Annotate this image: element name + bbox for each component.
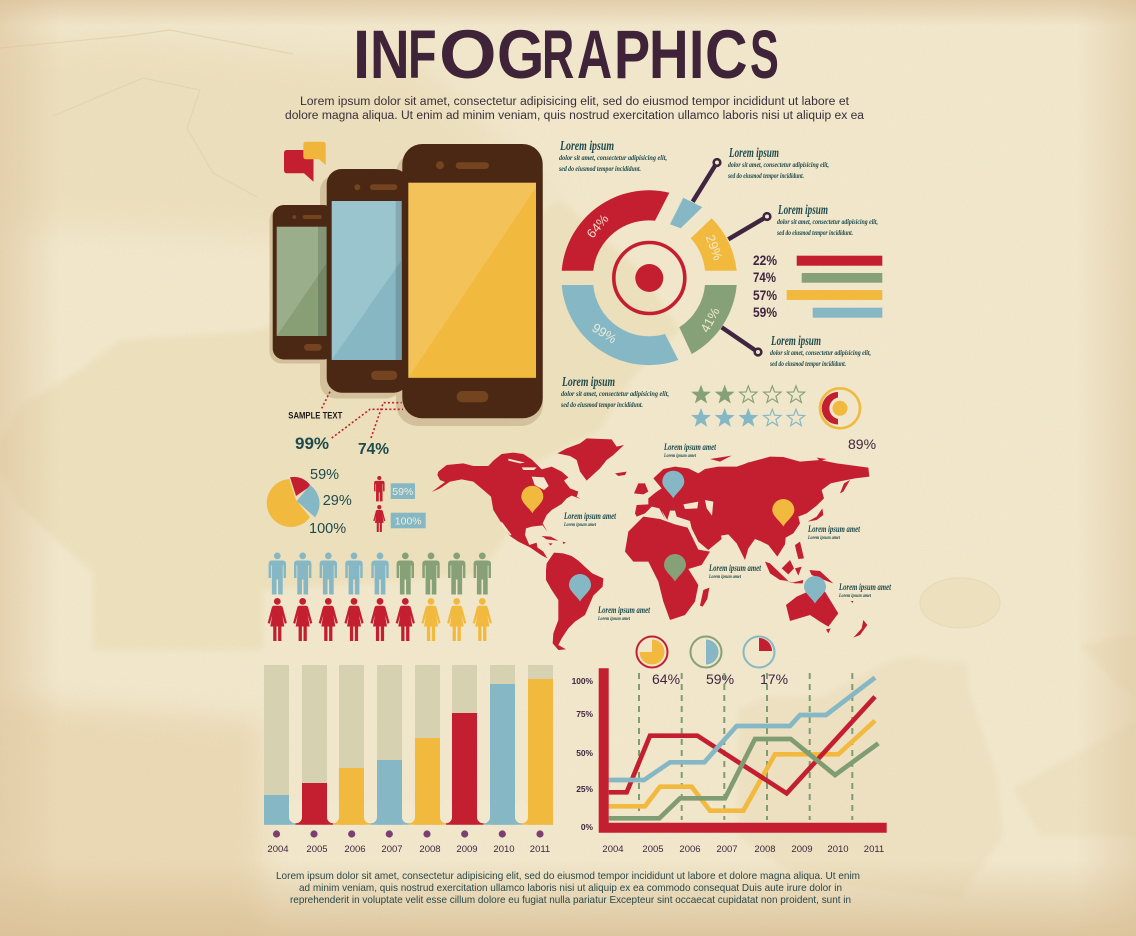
female icon bbox=[373, 505, 385, 532]
x axis labels: 2009 bbox=[791, 844, 813, 855]
centre target bbox=[614, 242, 685, 314]
southeast asia islands bbox=[765, 542, 833, 583]
iceland bbox=[615, 472, 627, 476]
title: C bbox=[705, 16, 748, 93]
map pin: south america bbox=[569, 574, 591, 602]
donut annotation: top right bbox=[727, 145, 829, 180]
y axis labels: 50% bbox=[576, 748, 594, 758]
map label: south america bbox=[597, 606, 650, 622]
map label: asia bbox=[807, 525, 860, 541]
male icon bbox=[374, 476, 385, 501]
world map bbox=[432, 438, 869, 650]
intro text: Lorem ipsum dolor sit amet, consectetur adipisicing elit, sed do eiusmod tempor incididunt ut labore et bbox=[300, 96, 850, 108]
red line bbox=[609, 697, 875, 793]
map label: europe: Lorem ipsum amet bbox=[663, 443, 716, 453]
y axis labels bbox=[572, 676, 594, 832]
donut annotation: bottom bbox=[560, 374, 669, 409]
icon: chat bubbles bbox=[284, 142, 326, 182]
donut annotation: top left: sed do eiusmod tempor incididunt. bbox=[558, 164, 641, 173]
gauge 89%: 89% bbox=[848, 436, 876, 452]
new zealand bbox=[851, 601, 867, 638]
gauge 89% bbox=[820, 388, 876, 452]
x axis labels: 2007 bbox=[716, 844, 738, 855]
map label: australia: Lorem ipsum amet bbox=[838, 593, 871, 599]
99 percent: 99% bbox=[295, 434, 329, 453]
labels bbox=[753, 252, 777, 320]
africa bbox=[625, 517, 710, 620]
bar values bbox=[264, 795, 296, 825]
green segment 41% bbox=[679, 285, 737, 354]
gauge 59%: 59% bbox=[706, 671, 734, 687]
map label: australia bbox=[838, 583, 891, 599]
line chart bbox=[572, 668, 887, 855]
map pin: asia bbox=[772, 499, 794, 526]
axes bbox=[599, 668, 887, 833]
blue stars bbox=[692, 409, 805, 426]
gauge 59% bbox=[690, 636, 734, 687]
pie chart: 100% bbox=[309, 521, 346, 537]
people pictogram: men bbox=[269, 552, 491, 594]
title: O bbox=[439, 16, 496, 93]
map label: north america: Lorem ipsum amet bbox=[563, 512, 616, 522]
footer text bbox=[276, 870, 860, 906]
labels: 22% bbox=[753, 252, 777, 268]
black sea and caspian sea bbox=[683, 500, 713, 516]
donut annotation: top right: dolor sit amet, consectetur adipisicing elit, bbox=[728, 160, 829, 169]
data lines bbox=[609, 678, 878, 818]
title: N bbox=[370, 16, 409, 93]
radial donut chart bbox=[562, 159, 770, 365]
donut annotation: bottom: Lorem ipsum bbox=[561, 374, 615, 389]
x axis labels: 2005 bbox=[642, 844, 664, 855]
map label: north america bbox=[563, 512, 616, 528]
south america bbox=[546, 553, 603, 650]
green line bbox=[609, 739, 878, 818]
title: G bbox=[497, 16, 545, 93]
map label: asia: Lorem ipsum amet bbox=[807, 525, 860, 535]
phones bbox=[270, 144, 543, 426]
gauge 17%: 17% bbox=[760, 671, 788, 687]
title: P bbox=[614, 16, 650, 93]
star ratings bbox=[692, 386, 805, 426]
red segment 64%: 64% bbox=[583, 211, 612, 241]
pie chart: 59% bbox=[310, 467, 339, 483]
britain bbox=[634, 483, 648, 494]
x axis labels: 2008 bbox=[754, 844, 776, 855]
title: I bbox=[352, 16, 370, 93]
year labels: 2009 bbox=[456, 844, 478, 855]
japan and kamchatka bbox=[808, 480, 850, 522]
donut annotation: middle right: dolor sit amet, consectetur adipisicing elit, bbox=[777, 217, 878, 226]
map label: africa: Lorem ipsum amet bbox=[708, 574, 741, 580]
blue segment 99% bbox=[562, 285, 678, 365]
greenland bbox=[557, 438, 624, 481]
north america bbox=[432, 453, 581, 558]
year labels: 2004 bbox=[267, 844, 289, 855]
map label: europe bbox=[663, 443, 716, 459]
phone shadows bbox=[270, 152, 543, 426]
map pin: africa bbox=[664, 554, 686, 582]
x axis labels: 2004 bbox=[602, 844, 624, 855]
caribbean islands bbox=[542, 536, 566, 545]
map pin: north america bbox=[521, 486, 543, 513]
female label: 100% bbox=[395, 516, 422, 528]
americas and greenland bbox=[432, 438, 627, 650]
title: H bbox=[649, 16, 689, 93]
year labels: 2005 bbox=[306, 844, 328, 855]
bar tracks bbox=[264, 665, 553, 825]
map label: south america: Lorem ipsum amet bbox=[597, 616, 630, 622]
year labels: 2010 bbox=[493, 844, 515, 855]
year labels: 2008 bbox=[419, 844, 441, 855]
donut annotation: lower right: Lorem ipsum bbox=[770, 333, 821, 348]
74 percent: 74% bbox=[358, 441, 389, 458]
pie chart: 29% bbox=[323, 493, 352, 509]
small pie gauges bbox=[636, 636, 788, 687]
donut annotation: top right: sed do eiusmod tempor incididunt. bbox=[727, 171, 804, 180]
year labels bbox=[267, 844, 550, 855]
gauge 17% bbox=[744, 636, 788, 687]
map label: north america: Lorem ipsum amet bbox=[563, 522, 596, 528]
pie chart bbox=[267, 467, 352, 537]
year labels: 2011 bbox=[530, 844, 550, 855]
people pictogram: women bbox=[268, 598, 492, 641]
footer text: ad minim veniam, quis nostrud exercitation ullamco laboris nisi ut aliquip ex ea commodo consequat Duis aute irure dolor in bbox=[299, 882, 842, 894]
dots bbox=[273, 830, 544, 838]
red segment 64% bbox=[562, 190, 669, 271]
stick connectors bbox=[693, 159, 770, 355]
gauge 64%: 64% bbox=[652, 671, 680, 687]
y axis labels: 25% bbox=[576, 784, 594, 794]
labels: 57% bbox=[753, 287, 777, 303]
x axis labels: 2006 bbox=[679, 844, 701, 855]
title: S bbox=[750, 16, 779, 93]
x axis labels: 2010 bbox=[827, 844, 849, 855]
y axis labels: 100% bbox=[572, 676, 594, 686]
blue line bbox=[609, 678, 875, 780]
map pin: australia bbox=[804, 576, 826, 604]
intro text bbox=[285, 96, 865, 122]
blue wedge bbox=[670, 198, 702, 228]
labels: 74% bbox=[753, 269, 776, 285]
male label: 59% bbox=[392, 486, 413, 498]
medium phone bbox=[327, 169, 409, 393]
map label: asia: Lorem ipsum amet bbox=[807, 535, 840, 541]
y axis labels: 0% bbox=[581, 822, 594, 832]
stacked bar chart bbox=[264, 665, 553, 855]
donut annotation: top left: Lorem ipsum bbox=[559, 138, 614, 153]
map label: south america: Lorem ipsum amet bbox=[597, 606, 650, 616]
labels: 59% bbox=[753, 304, 777, 320]
intro text: dolore magna aliqua. Ut enim ad minim veniam, quis nostrud exercitation ullamco laboris nisi ut aliquip ex ea bbox=[285, 110, 865, 122]
gender stat bbox=[373, 476, 426, 532]
europe, asia, africa and oceania bbox=[625, 456, 869, 638]
x axis labels: 2011 bbox=[864, 844, 884, 855]
green segment 41%: 41% bbox=[697, 304, 723, 335]
donut annotation: middle right: sed do eiusmod tempor incididunt. bbox=[776, 228, 853, 237]
map pin: europe bbox=[662, 471, 684, 498]
year labels: 2006 bbox=[344, 844, 366, 855]
title: F bbox=[408, 16, 437, 93]
map label: africa: Lorem ipsum amet bbox=[708, 564, 761, 574]
donut annotation: bottom: dolor sit amet, consectetur adipisicing elit, bbox=[561, 389, 669, 398]
gauge 64% bbox=[636, 636, 680, 687]
yellow line bbox=[609, 721, 875, 811]
title bbox=[352, 16, 779, 93]
yellow segment 29% bbox=[691, 218, 737, 271]
large phone bbox=[402, 144, 543, 418]
arctic slivers bbox=[710, 456, 827, 472]
small phone bbox=[273, 205, 335, 360]
donut annotation: middle right bbox=[776, 202, 878, 237]
yellow segment 29%: 29% bbox=[703, 233, 726, 263]
year labels: 2007 bbox=[381, 844, 403, 855]
title: R bbox=[542, 16, 574, 93]
donut annotation: lower right bbox=[769, 333, 871, 368]
title: A bbox=[577, 16, 612, 93]
rounded gaps bbox=[289, 800, 528, 823]
donut annotation: lower right: dolor sit amet, consectetur adipisicing elit, bbox=[770, 348, 871, 357]
y axis labels: 75% bbox=[576, 709, 594, 719]
dashed guides bbox=[639, 673, 852, 820]
eurasia bbox=[635, 457, 869, 560]
madagascar bbox=[700, 588, 709, 607]
blue segment 99%: 99% bbox=[589, 320, 620, 347]
green stars bbox=[692, 386, 805, 402]
donut annotation: top right: Lorem ipsum bbox=[728, 145, 779, 160]
donut annotation: top left bbox=[558, 138, 667, 173]
map label: australia: Lorem ipsum amet bbox=[838, 583, 891, 593]
title: I bbox=[689, 16, 704, 93]
hudson bay and northern channels bbox=[501, 459, 549, 535]
map label: europe: Lorem ipsum amet bbox=[663, 453, 696, 459]
horizontal bars bbox=[753, 252, 882, 320]
map label: africa bbox=[708, 564, 761, 580]
phone callouts bbox=[288, 392, 403, 458]
australia bbox=[786, 590, 838, 633]
sample text label: SAMPLE TEXT bbox=[288, 410, 343, 420]
footer text: reprehenderit in voluptate velit esse cillum dolore eu fugiat nulla pariatur Excepteur sint occaecat cupidatat non proident, sunt in bbox=[290, 894, 851, 906]
donut annotation: bottom: sed do eiusmod tempor incididunt. bbox=[560, 400, 643, 409]
donut annotation: top left: dolor sit amet, consectetur adipisicing elit, bbox=[559, 153, 667, 162]
donut annotation: middle right: Lorem ipsum bbox=[777, 202, 828, 217]
x axis labels bbox=[602, 844, 884, 855]
footer text: Lorem ipsum dolor sit amet, consectetur adipisicing elit, sed do eiusmod tempor incididunt ut labore et dolore magna aliqua. Ut enim bbox=[276, 870, 860, 882]
donut annotation: lower right: sed do eiusmod tempor incididunt. bbox=[769, 359, 846, 368]
